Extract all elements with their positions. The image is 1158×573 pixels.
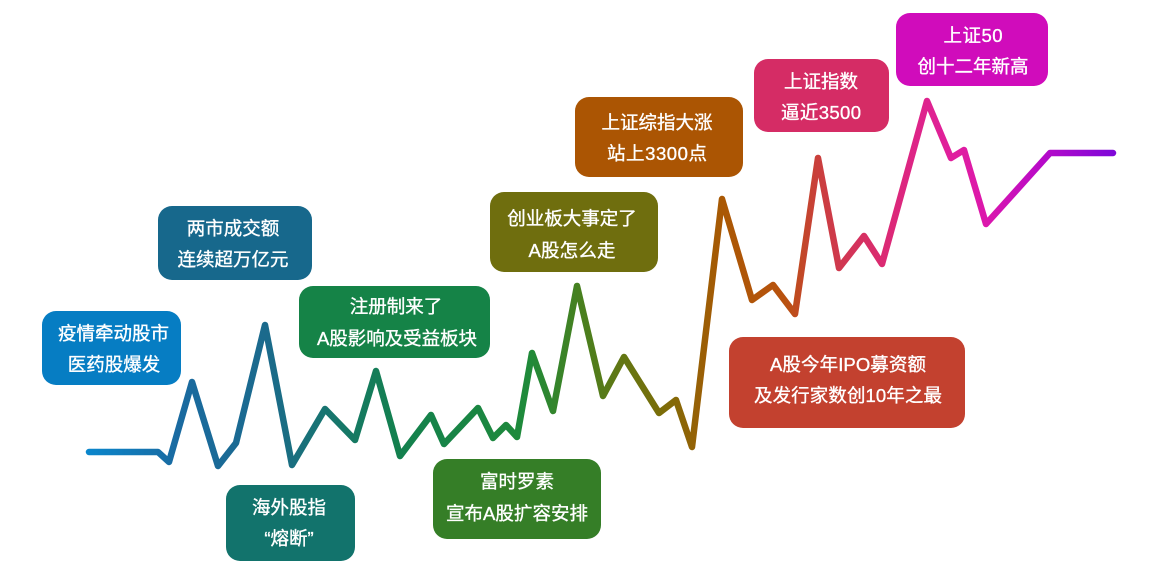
callout box: [42, 311, 181, 385]
callout text line 1: 两市成交额: [187, 218, 279, 239]
callout: 上证50: [896, 13, 1048, 86]
callout text line 1: 上证指数: [784, 71, 858, 92]
callout box: [754, 59, 889, 132]
callout text line 1: 海外股指: [252, 497, 326, 518]
callout text line 1: 上证50: [944, 25, 1002, 46]
callout: A股今年IPO募资额: [729, 337, 965, 428]
callout text line 1: 创业板大事定了: [507, 208, 637, 229]
callout text line 2: A股影响及受益板块: [317, 328, 477, 349]
callout box: [433, 459, 601, 539]
callout: 上证综指大涨: [575, 97, 743, 177]
callout box: [299, 286, 490, 358]
callout box: [896, 13, 1048, 86]
callout: 富时罗素: [433, 459, 601, 539]
callout box: [490, 192, 658, 272]
callout box: [226, 485, 355, 561]
callout: 注册制来了: [299, 286, 490, 358]
callout text line 2: 及发行家数创10年之最: [754, 385, 942, 406]
callout text line 1: 疫情牵动股市: [58, 323, 169, 344]
callout text line 1: 上证综指大涨: [601, 112, 713, 133]
callout box: [158, 206, 312, 280]
callout text line 2: A股怎么走: [528, 240, 616, 261]
callout text line 1: A股今年IPO募资额: [770, 354, 926, 375]
callout text line 2: 医药股爆发: [68, 354, 160, 375]
callout: 疫情牵动股市: [42, 311, 181, 385]
callout: 海外股指熔断: [226, 485, 355, 561]
callout: 创业板大事定了: [490, 192, 658, 272]
callout: 上证指数: [754, 59, 889, 132]
callout text line 1: 注册制来了: [350, 296, 442, 317]
callout box: [575, 97, 743, 177]
callout text line 2: 逼近3500: [781, 102, 861, 123]
callout text line 2: 宣布A股扩容安排: [446, 503, 588, 524]
callout box: [729, 337, 965, 428]
callout text line 2: 站上3300点: [607, 143, 707, 164]
callout: 两市成交额: [158, 206, 312, 280]
callout text line 2: “熔断”: [264, 528, 314, 549]
callout text line 2: 创十二年新高: [917, 56, 1029, 77]
callout text line 1: 富时罗素: [480, 471, 554, 492]
line chart: index trend: [89, 101, 1113, 466]
callout text line 2: 连续超万亿元: [177, 249, 289, 270]
